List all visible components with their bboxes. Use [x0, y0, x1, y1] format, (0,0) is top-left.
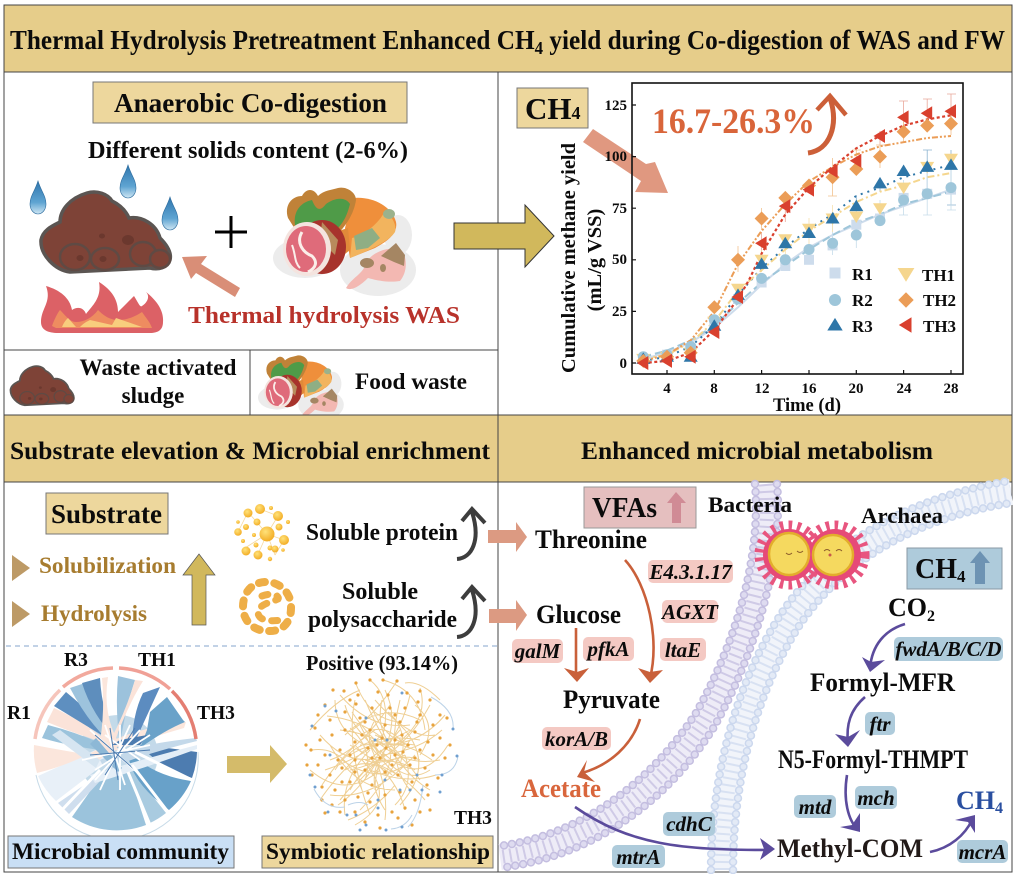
gene chips: bacterial enzymes: ltaE: [665, 638, 701, 662]
title banner: Thermal Hydrolysis Pretreatment Enhanced CH: [10, 25, 571, 55]
y axis tick labels: 50: [612, 252, 627, 268]
network nodes: negative: [310, 693, 457, 830]
pathway labels: archaea side: [777, 593, 1003, 863]
label: VFAs with up arrow: VFAs: [592, 492, 657, 524]
arrow: protein to threonine: [488, 522, 527, 552]
heading: substrate: [46, 493, 168, 534]
panel: microbial community chord diagram: [7, 650, 235, 868]
callout: 16.7-26.3% increase: [652, 96, 846, 153]
chart legend: TH3: [923, 317, 956, 336]
chart legend: R3: [852, 317, 873, 336]
panel: symbiotic network: [262, 651, 493, 868]
y axis tick labels: 125: [604, 98, 627, 114]
section heading: enhanced microbial metabolism: [498, 415, 1012, 482]
outer arc sectors: [35, 668, 196, 739]
pathway labels: archaea side: Methyl-COM: [777, 834, 923, 863]
axis ticks: [632, 105, 951, 374]
y axis tick labels: 25: [612, 304, 627, 320]
gene chips: archaeal enzymes: cdhC: [666, 812, 713, 836]
gene chips: bacterial enzymes: AGXT: [660, 600, 719, 624]
list: solubilization and hydrolysis: [12, 553, 176, 627]
heading: anaerobic co-digestion: Anaerobic Co-digestion: [114, 88, 387, 118]
section heading: substrate elevation: Substrate elevation & Microbial enrichment: [10, 438, 491, 465]
label: R1: R1: [7, 703, 31, 724]
series TH3 markers: [637, 104, 956, 370]
panel: enhanced microbial metabolism: [500, 481, 1011, 870]
pathway labels: archaea side: Formyl-MFR: [810, 668, 955, 697]
arrows: archaeal pathway: [575, 624, 975, 860]
arrow: polysaccharide increase: [457, 587, 485, 637]
title banner: 4: [535, 38, 543, 58]
pathway labels: bacteria side: Acetate: [521, 774, 601, 803]
icon: soluble protein particles: [234, 504, 290, 561]
series TH2 markers: [636, 117, 958, 368]
pathway labels: bacteria side: [521, 525, 660, 803]
fitted curves: [643, 115, 951, 363]
label: TH3 network: TH3: [454, 808, 492, 829]
series R2 markers: [638, 182, 956, 362]
icon: flame: [41, 282, 163, 333]
section heading: enhanced microbial metabolism: Enhanced microbial metabolism: [581, 438, 933, 465]
x axis tick labels: 4: [663, 381, 671, 397]
label: VFAs with up arrow: [584, 487, 696, 528]
gene chips: bacterial enzymes: korA/B: [545, 727, 608, 751]
CH4 label box: CH4: [525, 91, 580, 126]
arrow: gold up: [183, 554, 215, 625]
x axis tick labels: 20: [848, 381, 864, 397]
label: bacteria: Bacteria: [708, 492, 792, 517]
label: thermal hydrolysis WAS: Thermal hydrolysis WAS: [188, 303, 460, 329]
gene chips: bacterial enzymes: [512, 560, 733, 751]
dashed divider: [6, 645, 498, 647]
gene chips: archaeal enzymes: mcrA: [959, 840, 1006, 864]
pathway labels: archaea side: 4: [995, 800, 1003, 817]
y axis tick labels: [604, 98, 627, 372]
chart legend: R1: [852, 265, 873, 284]
callout: 16.7-26.3% increase: 16.7-26.3%: [652, 101, 815, 141]
label: microbial community: Microbial community: [12, 839, 229, 865]
icon: sludge with water drops: [30, 165, 178, 272]
gene chips: bacterial enzymes: galM: [514, 639, 562, 663]
series R1 markers: [638, 185, 956, 364]
label: symbiotic relationship: Symbiotic relationship: [266, 839, 490, 865]
gene chips: bacterial enzymes: pfkA: [586, 637, 630, 661]
chord ribbons: [34, 676, 198, 840]
legend: food waste: Food waste: [355, 369, 467, 394]
plus sign: [215, 216, 247, 248]
list: solubilization and hydrolysis: Solubilization: [39, 553, 176, 578]
arrow: polysaccharide to glucose: [489, 600, 527, 631]
panel: anaerobic co-digestion: [30, 82, 460, 333]
x axis tick labels: 28: [944, 381, 958, 397]
pathway labels: archaea side: 2: [927, 608, 935, 625]
label: CH4 with up arrow: 4: [957, 567, 966, 586]
legend: food waste: [258, 355, 467, 420]
label: CH4 with up arrow: CH: [915, 554, 957, 585]
label: soluble polysaccharide: polysaccharide: [308, 607, 457, 633]
label: R3: R3: [64, 650, 88, 671]
label: soluble polysaccharide: Soluble: [342, 579, 418, 605]
solids content label: Different solids content (2-6%): [88, 138, 408, 164]
gene chips: archaeal enzymes: mtd: [799, 795, 832, 819]
legend: waste activated sludge: Waste activated: [80, 355, 237, 380]
chart legend: R2: [852, 291, 873, 310]
gene chips: archaeal enzymes: mtrA: [616, 845, 661, 869]
legend: waste activated sludge: sludge: [122, 383, 184, 408]
series R3 markers: [636, 158, 958, 364]
pathway labels: bacteria side: Threonine: [535, 525, 647, 554]
x axis tick labels: [663, 381, 958, 397]
legend: waste activated sludge: [10, 355, 237, 408]
panel: substrate: [12, 493, 485, 637]
label: positive percentage: Positive (93.14%): [306, 651, 458, 675]
arrow: CH4 pointing to chart: [583, 129, 668, 193]
arrows: bacterial pathway: [564, 560, 663, 782]
y axis tick labels: 100: [604, 149, 627, 165]
list: solubilization and hydrolysis: Hydrolysis: [41, 601, 147, 626]
pathway labels: archaea side: N5-Formyl-THMPT: [778, 745, 968, 774]
CH4 label box: [517, 88, 588, 128]
gene chips: archaeal enzymes: [612, 637, 1008, 869]
label: TH3: TH3: [197, 703, 235, 724]
series TH1 markers: [636, 154, 958, 365]
gene chips: archaeal enzymes: mch: [857, 786, 895, 810]
error bars: [738, 94, 956, 272]
y axis title: [558, 142, 606, 373]
gene chips: archaeal enzymes: fwdA/B/C/D: [895, 637, 1002, 661]
title banner: [4, 5, 1012, 72]
heading: anaerobic co-digestion: [93, 82, 407, 123]
pathway labels: bacteria side: Pyruvate: [563, 685, 660, 714]
label: CH4 with up arrow: [907, 548, 1002, 589]
network edges: negative: [314, 697, 458, 829]
x axis tick labels: 8: [710, 381, 718, 397]
icon: bacteria and archaea cells: [760, 526, 864, 584]
arrow: protein increase: [457, 509, 485, 559]
pathway labels: archaea side: CH: [956, 786, 995, 815]
icon: soluble polysaccharide chain: [243, 582, 291, 631]
pathway labels: bacteria side: Glucose: [536, 600, 621, 629]
network nodes: positive: [306, 680, 450, 828]
x axis title: Time (d): [773, 396, 841, 416]
label: TH1: TH1: [138, 650, 176, 671]
arrow: digestion to methane: [454, 205, 554, 267]
chart legend: TH1: [922, 266, 955, 285]
y axis title: Cumulative methane yield: [558, 142, 580, 373]
icon: food waste: [273, 188, 416, 296]
heading: substrate: Substrate: [51, 499, 162, 529]
archaea membrane: [711, 481, 1011, 870]
label: soluble protein: Soluble protein: [306, 520, 458, 546]
plot frame: [632, 83, 963, 374]
chart legend: TH2: [923, 291, 956, 310]
y axis tick labels: 0: [620, 356, 627, 372]
gene chips: archaeal enzymes: ftr: [870, 712, 891, 736]
label: soluble polysaccharide: [308, 579, 457, 633]
chart legend: [827, 265, 956, 336]
x axis tick labels: 16: [802, 381, 817, 397]
arrow: community to network: [227, 745, 287, 783]
y axis tick labels: 75: [612, 201, 627, 217]
chart: cumulative methane yield: [558, 83, 963, 416]
x axis tick labels: 24: [896, 381, 912, 397]
bacteria membrane: [500, 484, 778, 868]
y axis title: (mL/g VSS): [584, 209, 606, 311]
gene chips: bacterial enzymes: E4.3.1.17: [648, 560, 733, 584]
pathway labels: archaea side: CO: [888, 593, 927, 622]
x axis tick labels: 12: [754, 381, 770, 397]
section heading: substrate elevation: [4, 415, 498, 482]
label: archaea: Archaea: [861, 503, 943, 528]
network edges: [310, 680, 448, 825]
arrow: thermal hydrolysis to sludge: [182, 256, 240, 297]
